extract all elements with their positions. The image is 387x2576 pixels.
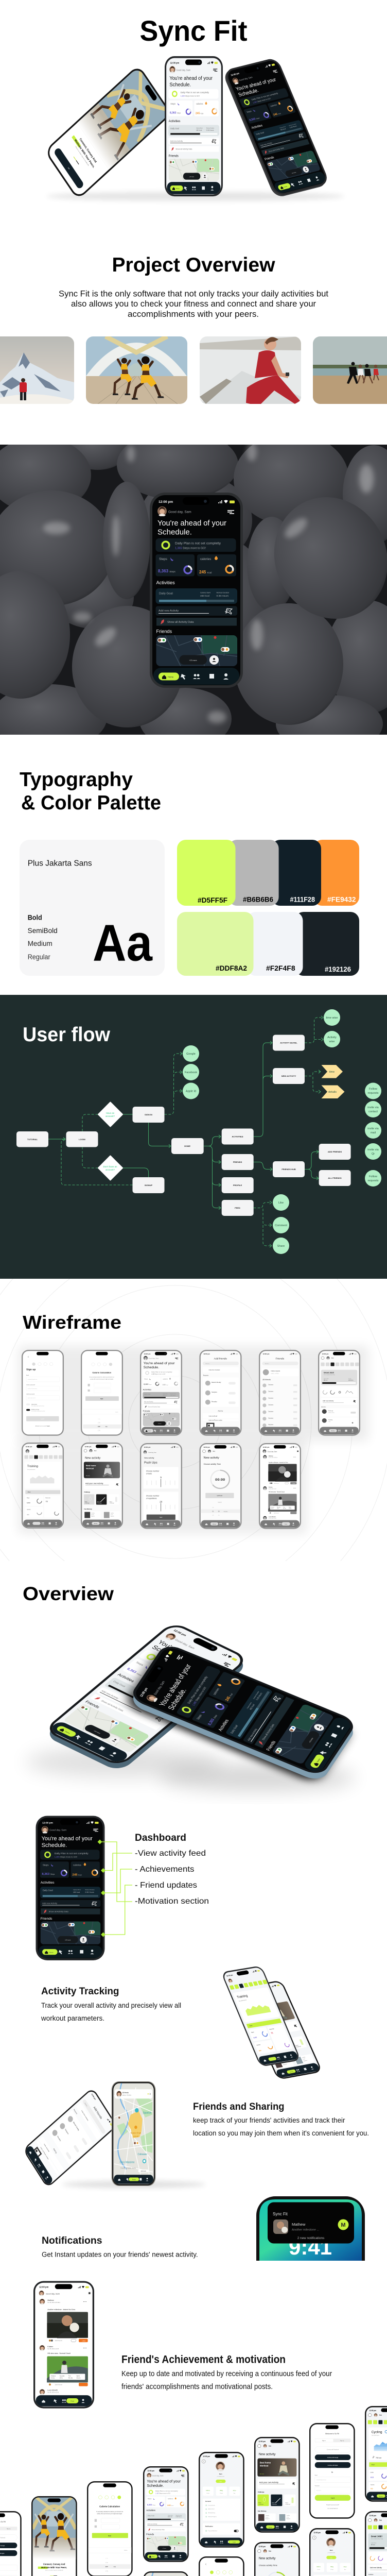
text: friends and sharing: keep track of your friends' activities and track their	[193, 2116, 345, 2124]
text: dashboard features: - Achievements	[135, 1865, 195, 1874]
text: friends and sharing	[193, 2101, 369, 2137]
hero phones	[44, 56, 345, 201]
option circles: Qr	[372, 1153, 375, 1156]
wireframe: add friends	[200, 1350, 241, 1436]
option circles: Facebook	[185, 1071, 197, 1074]
project overview text: also allows you to check your fitness and connect and share your	[71, 299, 316, 309]
flow box: feed	[222, 1200, 254, 1216]
option chevrons: details	[328, 1091, 337, 1094]
text: activity tracking	[41, 1986, 181, 2022]
phone: onboarding tilted	[44, 64, 172, 200]
text: activity tracking: Activity Tracking	[41, 1986, 119, 1997]
option circles: Follow	[369, 1175, 377, 1178]
text: dashboard features: Dashboard	[135, 1833, 186, 1843]
project overview text: accomplishments with your peers.	[128, 310, 259, 319]
flow box: friends hub: FRIENDS HUB	[282, 1168, 296, 1171]
panel: typography specimen: Bold	[28, 914, 42, 921]
flow connectors	[48, 1018, 323, 1246]
screen: map	[143, 2571, 189, 2576]
phone: dark dashboard	[150, 493, 243, 688]
flow box: profile	[222, 1177, 254, 1193]
flow box: new activity	[273, 1068, 305, 1084]
decision: have an account: Have an	[106, 1112, 115, 1114]
option circles: Apple Id	[186, 1090, 196, 1093]
wireframe: dashboard	[140, 1350, 182, 1436]
flow box: home: HOME	[184, 1145, 190, 1147]
decision: no account: Don't have an	[103, 1165, 117, 1168]
option circles: requests	[367, 1092, 379, 1095]
activity tracking phones	[221, 1965, 323, 2080]
option circles: Share	[277, 1245, 285, 1248]
panel: typography specimen: Plus Jakarta Sans	[28, 859, 92, 868]
text: notifications	[42, 2235, 198, 2259]
text: friend's achievement	[121, 2353, 332, 2391]
flow box: activity detail	[273, 1035, 305, 1051]
option circles: requests	[367, 1179, 379, 1182]
wireframe: feed	[259, 1443, 301, 1529]
text: friends and sharing: location so you may join them when it's convenient for you.	[193, 2129, 369, 2137]
notification mockup: 9:41	[289, 2235, 332, 2259]
option circles: Like	[278, 1201, 284, 1205]
panel: colour palette: #FE9432	[327, 895, 356, 904]
notification mockup: 2 new notifications	[297, 2236, 324, 2240]
notification mockup: Mathew	[292, 2222, 306, 2227]
option circles: wise	[328, 1040, 335, 1043]
heading: user flow: User flow	[23, 1024, 111, 1046]
heading: typography and colour palette: Typography	[20, 769, 133, 791]
screen: sign up	[199, 2556, 244, 2576]
flow box: home	[171, 1138, 204, 1154]
screen: dashboard	[143, 2466, 189, 2562]
flow box: login	[66, 1131, 98, 1147]
phone: dark dashboard tilted	[222, 57, 330, 198]
dashboard phone	[36, 1816, 104, 1960]
phone: dark dashboard flat	[128, 1642, 358, 1783]
screen: great job right	[365, 2511, 387, 2576]
flow box: add friends: ADD FRIENDS	[328, 1150, 342, 1153]
panel: colour palette: #111F28	[290, 895, 315, 904]
notification mockup: Another milestone ...	[292, 2229, 320, 2232]
option circles: Google	[186, 1053, 196, 1056]
phone: add friends tilted	[23, 2087, 117, 2189]
panel: user flow	[0, 995, 387, 1279]
panel: typography specimen: Aa	[93, 914, 153, 972]
flow box: activities: ACTIVITIES	[232, 1136, 243, 1138]
option circles: invite via	[367, 1127, 379, 1130]
screen: welcome	[309, 2423, 355, 2519]
option circles: Follow	[369, 1088, 377, 1091]
screen: cycling right	[365, 2406, 387, 2502]
option circles: Activity	[327, 1036, 337, 1039]
panel: colour palette: #DDF8A2	[216, 964, 247, 972]
notification mockup: M	[341, 2222, 346, 2228]
photo: athletes on bridge	[86, 336, 187, 404]
flow box: friends: FRIENDS	[233, 1161, 242, 1163]
option circles: invite via	[367, 1106, 379, 1109]
text: friend's achievement: friends' accomplishments and motivational posts.	[121, 2382, 273, 2391]
flow box: new activity: NEW ACTIVITY	[282, 1075, 296, 1077]
photo: mountain	[0, 336, 74, 404]
wireframe: timer	[200, 1443, 241, 1529]
flow box: add friends	[319, 1144, 351, 1160]
project overview text: Sync Fit is the only software that not only tracks your daily activities but	[59, 290, 328, 299]
flow box: login: LOGIN	[79, 1138, 85, 1141]
phone: training	[221, 1965, 301, 2067]
text: notifications: Notifications	[42, 2235, 102, 2246]
screens gallery	[0, 2406, 387, 2576]
panel: typography specimen: Regular	[28, 953, 50, 961]
panel: colour palette	[177, 840, 359, 976]
text: notifications: Get Instant updates on your friends' newest activity.	[42, 2251, 198, 2259]
text: dashboard features	[135, 1833, 209, 1906]
dashboard connectors	[98, 1839, 132, 1937]
flow box: friends	[222, 1154, 254, 1170]
flow box: tutorial	[16, 1131, 48, 1147]
option chevrons: time	[329, 1071, 335, 1074]
heading: wireframe: Wireframe	[23, 1312, 121, 1333]
text: friend's achievement: Friend's Achievement & motivation	[121, 2353, 286, 2366]
decision: no account	[98, 1156, 122, 1180]
option circles: mail	[371, 1131, 376, 1134]
heading: typography and colour palette: & Color Palette	[21, 792, 161, 814]
flow box: friends hub	[273, 1161, 305, 1177]
flow box: all friends: ALL FRIENDS	[328, 1177, 342, 1179]
wireframe: sign up	[22, 1350, 64, 1436]
text: friend's achievement: Keep up to date and motivated by receiving a continuous feed of your	[121, 2369, 332, 2378]
flow box: sign in: SIGN IN	[145, 1113, 152, 1116]
flow box: all friends	[319, 1170, 351, 1186]
panel: pebble background with phone	[0, 445, 387, 735]
wireframe: great job	[318, 1350, 360, 1436]
screen: profile second	[309, 2528, 355, 2576]
text: friends and sharing: Friends and Sharing	[193, 2101, 284, 2112]
screen: welcome left	[0, 2511, 22, 2576]
flow box: activities	[222, 1128, 254, 1145]
option circles: contact	[368, 1110, 378, 1113]
heading: typography and colour palette	[20, 769, 161, 814]
heading: project overview: Project Overview	[112, 254, 275, 276]
wireframes grid	[19, 1346, 368, 1534]
panel: colour palette: #192126	[325, 965, 351, 973]
screen: onboarding	[31, 2496, 77, 2576]
flow box: activity detail: ACTIVITY DETAIL	[280, 1042, 297, 1044]
flow box: signup: SIGNUP	[145, 1184, 152, 1187]
panel: colour palette: #F2F4F8	[266, 964, 295, 972]
phone: new activity	[237, 1980, 323, 2080]
flow box: profile: PROFILE	[233, 1184, 242, 1187]
screen: calorie calculation	[87, 2481, 133, 2576]
wireframe: new activity	[81, 1443, 123, 1529]
flow box: signup	[133, 1177, 165, 1193]
flow box: sign in	[133, 1107, 165, 1123]
phone: friends feed	[33, 2281, 94, 2409]
option circles	[183, 1009, 381, 1254]
option circles: Comment	[275, 1224, 287, 1227]
screen: profile	[199, 2452, 244, 2548]
heading: overview: Overview	[23, 1583, 114, 1604]
option circles: invite via	[367, 1148, 379, 1151]
wireframe: calorie calculation	[81, 1350, 123, 1436]
panel: colour palette: #D5FF5F	[198, 896, 227, 904]
photo: woman with watch	[200, 336, 301, 406]
text: dashboard features: -View activity feed	[135, 1849, 206, 1858]
wireframe: friends	[259, 1350, 301, 1436]
decision: no account: account?	[105, 1168, 115, 1171]
text: activity tracking: Track your overall activity and precisely view all	[41, 2002, 181, 2009]
decision: have an account: account?	[105, 1115, 115, 1117]
text: activity tracking: workout parameters.	[41, 2014, 104, 2022]
text: dashboard features: - Friend updates	[135, 1881, 197, 1890]
panel: typography specimen: Medium	[28, 940, 52, 947]
option circles: time wise	[326, 1016, 338, 1020]
friends phones	[23, 2081, 206, 2189]
panel: colour palette: #B6B6B6	[243, 895, 273, 904]
decision: have an account	[98, 1103, 122, 1126]
project overview text	[59, 290, 328, 319]
wireframe: push ups	[140, 1443, 182, 1529]
flow box: tutorial: TUTORIAL	[27, 1138, 38, 1141]
flow box: feed: FEED	[235, 1207, 240, 1209]
phone: map	[112, 2081, 155, 2186]
phone: light dashboard flat	[43, 1621, 250, 1772]
option chevrons	[321, 1065, 345, 1098]
panel: typography specimen	[20, 840, 165, 976]
phone: light dashboard	[165, 56, 223, 196]
notification mockup: Sync Fit	[273, 2212, 288, 2216]
screen: new activity second	[254, 2437, 300, 2533]
text: dashboard features: -Motivation section	[135, 1897, 209, 1906]
notification mockup	[256, 2196, 365, 2261]
decorative concentric arcs	[0, 1279, 387, 1561]
screen: timer	[254, 2542, 300, 2576]
photo: runners on beach	[313, 336, 387, 404]
title: Sync Fit	[140, 14, 247, 47]
overview 3D phones	[26, 1621, 358, 1791]
wireframe: training	[22, 1443, 64, 1529]
panel: typography specimen: SemiBold	[28, 927, 58, 935]
